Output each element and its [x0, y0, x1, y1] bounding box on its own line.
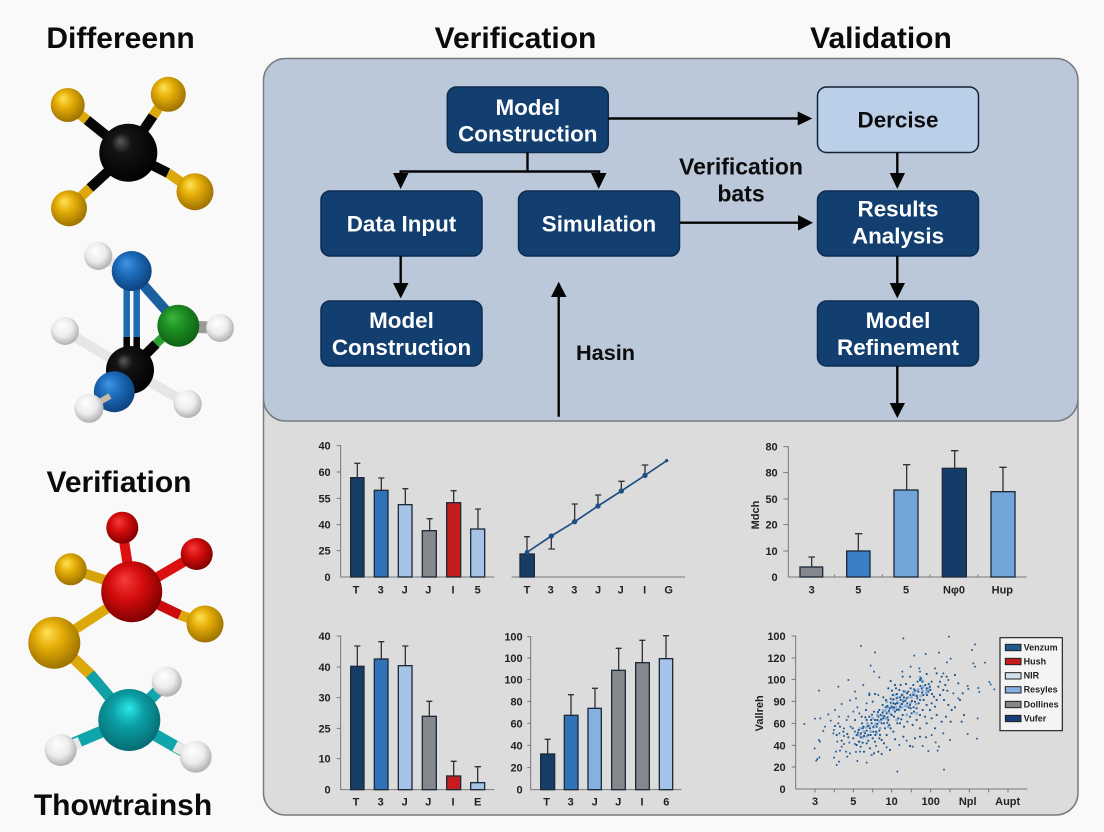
- legend: NIR: [1024, 671, 1040, 681]
- scatter plot: bottom right: 0: [780, 784, 786, 796]
- line chart: top middle: [512, 459, 685, 596]
- scatter plot: bottom right: 100: [767, 631, 786, 643]
- icon: black and yellow molecule: [51, 77, 214, 226]
- line chart: top middle: 3: [571, 584, 577, 596]
- bar chart: top left: 3: [378, 584, 384, 596]
- bar chart: top right: 80: [765, 468, 778, 480]
- box: simulation: [518, 191, 680, 256]
- bar chart: bottom middle: 3: [568, 796, 574, 808]
- bar chart: top left: J: [402, 584, 408, 596]
- arrow: model refinement downward: [890, 366, 905, 418]
- scatter plot: bottom right: Aupt: [995, 796, 1021, 808]
- legend: Venzum: [1024, 642, 1058, 652]
- heading: validation: Validation: [810, 22, 952, 55]
- bar chart: top right: Hup: [992, 585, 1013, 597]
- box: model refinement: Model: [866, 308, 930, 333]
- legend: Vufer: [1024, 713, 1047, 723]
- bar chart: top right: 5: [903, 585, 909, 597]
- scatter plot: bottom right: 3: [812, 796, 818, 808]
- box: model construction top: Construction: [458, 122, 597, 147]
- heading: verification molecule: Verifiation: [46, 466, 192, 499]
- bar chart: bottom left: I: [451, 796, 455, 808]
- bar chart: top left: 40: [318, 441, 331, 453]
- bar chart: top left: 40: [318, 520, 331, 532]
- box: decision: [818, 87, 978, 152]
- bar chart: top right: 80: [765, 442, 778, 454]
- box: results analysis: Results: [858, 197, 938, 222]
- bar chart: bottom middle: 80: [510, 696, 523, 708]
- bar chart: bottom middle: 60: [510, 718, 523, 730]
- scatter plot: bottom right: 40: [773, 740, 786, 752]
- bar chart: bottom middle: I: [640, 796, 644, 808]
- bar chart: top left: I: [451, 584, 455, 596]
- scatter plot: bottom right: 20: [773, 762, 786, 774]
- box: model construction top: Model: [495, 95, 560, 120]
- line chart: top middle: 3: [548, 584, 554, 596]
- line chart: top middle: J: [618, 584, 624, 596]
- line chart: top middle: G: [664, 584, 673, 596]
- bar chart: top right: 10: [765, 546, 778, 558]
- bar chart: bottom middle: J: [592, 796, 598, 808]
- label: verification bats: bats: [717, 181, 765, 207]
- scatter points: sparse outliers: [804, 637, 994, 772]
- bar chart: bottom left: J: [402, 796, 408, 808]
- bar chart: top left: 0: [325, 572, 331, 584]
- bar chart: bottom middle: 6: [663, 796, 669, 808]
- scatter plot: bottom right: 90: [773, 696, 786, 708]
- bar chart: bottom left: 40: [318, 631, 331, 643]
- arrow: decision to results analysis: [890, 152, 905, 189]
- arrow: simulation to results analysis: [680, 215, 813, 230]
- bar chart: top right: Nφ0: [943, 585, 965, 597]
- line chart: top middle: T: [524, 584, 531, 596]
- box: model construction lower: Construction: [332, 335, 471, 360]
- bar chart: top left: J: [425, 584, 431, 596]
- bar chart: bottom left: 0: [325, 785, 331, 797]
- bar chart: bottom middle: 0: [517, 785, 523, 797]
- heading: bottom molecule: Thowtrainsh: [34, 789, 212, 822]
- bar chart: bottom left: T: [353, 796, 360, 808]
- bar chart: bottom left: E: [474, 796, 481, 808]
- line chart: top middle: I: [643, 584, 646, 596]
- panel: charts: [264, 380, 1078, 815]
- box: results analysis: Analysis: [852, 224, 944, 249]
- arrow: data input to model construction: [393, 256, 408, 298]
- arrow: results analysis to model refinement: [890, 256, 905, 298]
- bar chart: bottom left: [318, 631, 494, 808]
- line chart: top middle: J: [595, 584, 601, 596]
- box: model refinement: Refinement: [837, 335, 959, 360]
- bar chart: top left: [318, 441, 494, 596]
- bar chart: top right: 3: [809, 585, 815, 597]
- legend: Resyles: [1024, 685, 1058, 695]
- bar chart: top right: 0: [772, 572, 778, 584]
- box: model construction lower: Model: [369, 308, 434, 333]
- bar chart: top left: 55: [318, 493, 331, 505]
- arrow: model construction to decision: [608, 112, 812, 126]
- bar chart: bottom left: J: [425, 796, 431, 808]
- scatter plot: bottom right: 100: [922, 796, 940, 808]
- box: decision: Dercise: [858, 108, 938, 133]
- label: verification bats: Verification: [679, 153, 803, 179]
- legend: Hush: [1024, 656, 1046, 666]
- box: simulation: Simulation: [542, 212, 656, 236]
- icon: blue green and white molecule: [51, 242, 234, 423]
- scatter points: dense cluster: [835, 673, 964, 754]
- bar chart: bottom left: 40: [318, 662, 331, 674]
- scatter plot: bottom right: 100: [767, 674, 786, 686]
- bar chart: top left: 25: [318, 546, 331, 558]
- bar chart: bottom middle: J: [615, 796, 621, 808]
- bar chart: bottom middle: 100: [504, 674, 523, 686]
- bar chart: bottom left: 25: [318, 723, 331, 735]
- scatter plot: bottom right: Vallreh: [754, 695, 766, 731]
- heading: left column: Differeenn: [46, 22, 195, 55]
- scatter plot: bottom right: 5: [850, 796, 856, 808]
- panel: verification and validation workflow: [264, 58, 1078, 421]
- scatter plot: bottom right: 10: [886, 796, 898, 808]
- scatter plot: bottom right: Npl: [959, 796, 977, 808]
- scatter plot: bottom right: 60: [773, 718, 786, 730]
- bar chart: bottom middle: 40: [510, 740, 523, 752]
- bar chart: bottom left: 3: [378, 796, 384, 808]
- legend: [1000, 638, 1062, 731]
- arrow: upward to simulation: [551, 282, 566, 417]
- scatter plot: bottom right: [754, 631, 1062, 808]
- bar chart: top left: T: [353, 584, 360, 596]
- bar chart: top left: 5: [475, 584, 481, 596]
- box: model construction top: [447, 87, 608, 152]
- box: data input: Data Input: [347, 212, 457, 236]
- box: model refinement: [818, 301, 978, 366]
- bar chart: top right: 5: [855, 585, 861, 597]
- label: verification bats: [679, 153, 803, 207]
- bar chart: top right: 50: [765, 494, 778, 506]
- arrow: model construction branches to data input and simulation: [393, 152, 606, 189]
- bar chart: top right: 20: [765, 520, 778, 532]
- label: hasin: Hasin: [576, 340, 635, 365]
- bar chart: top left: 60: [318, 467, 331, 479]
- bar chart: bottom left: 30: [318, 693, 331, 705]
- bar chart: bottom left: 10: [318, 754, 331, 766]
- scatter plot: bottom right: 120: [767, 653, 786, 665]
- bar chart: bottom middle: 100: [504, 632, 523, 644]
- bar chart: bottom middle: T: [543, 796, 550, 808]
- bar chart: bottom middle: 20: [510, 763, 523, 775]
- scatter points: light cluster: [857, 677, 929, 737]
- bar chart: bottom middle: [504, 632, 682, 808]
- bar chart: top right: Mdch: [750, 500, 762, 529]
- heading: verification: Verification: [435, 22, 596, 55]
- box: results analysis: [818, 191, 978, 256]
- icon: red yellow and teal molecule: [28, 512, 223, 773]
- legend: Dollines: [1024, 699, 1059, 709]
- bar chart: bottom middle: 100: [504, 653, 523, 665]
- box: model construction lower: [321, 301, 482, 366]
- bar chart: top right: [750, 442, 1027, 597]
- box: data input: [321, 191, 482, 256]
